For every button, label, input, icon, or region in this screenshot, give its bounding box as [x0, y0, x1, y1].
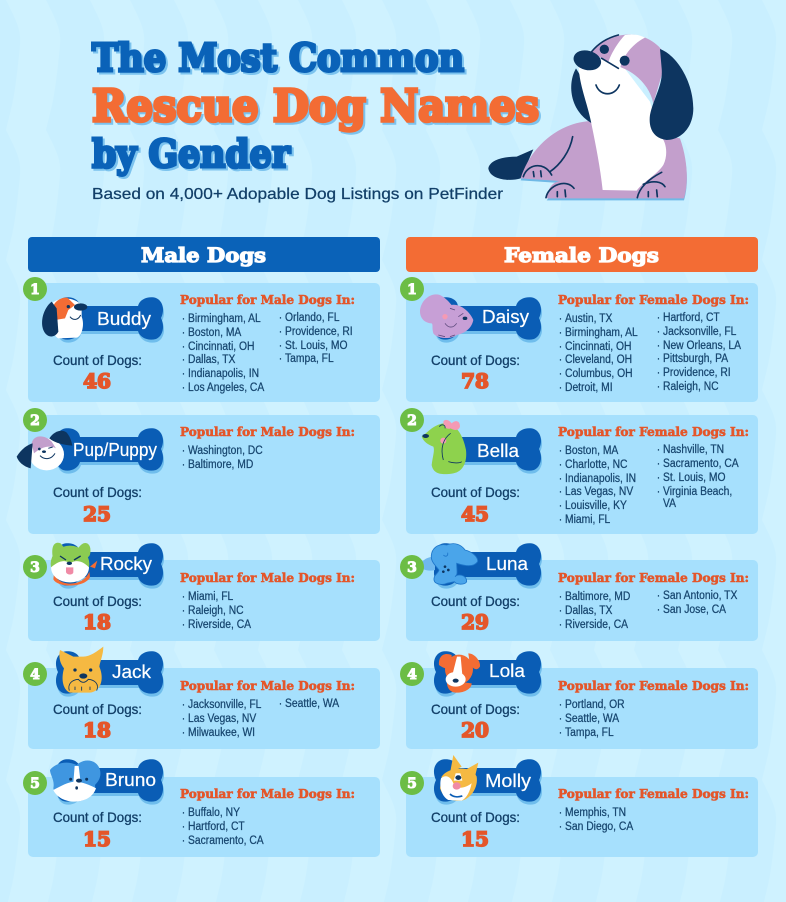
- card: Male 4 Jack: [23, 647, 380, 749]
- city list: Raleigh, NC: [663, 380, 719, 393]
- city list: Boston, MA: [565, 444, 619, 457]
- city list: Raleigh, NC: [188, 604, 244, 617]
- city list: ·: [559, 367, 562, 380]
- count value: 25: [83, 502, 111, 526]
- city list: ·: [559, 590, 562, 603]
- icon: Pup dog: [17, 431, 72, 470]
- city list: ·: [559, 806, 562, 819]
- icon: Bruno dog: [50, 760, 100, 802]
- city list: [182, 311, 353, 394]
- dog name: Lola: [489, 661, 526, 681]
- icon: Rocky dog: [51, 543, 97, 585]
- city list: ·: [182, 604, 185, 617]
- dog name: Molly: [485, 771, 531, 791]
- city list: ·: [657, 380, 660, 393]
- title: The Most Common: [92, 35, 464, 80]
- list heading: Popular for Female Dogs In:: [558, 570, 749, 585]
- icon: Bella dog: [422, 420, 466, 474]
- city list: ·: [559, 381, 562, 394]
- city list: [559, 698, 625, 739]
- city list: ·: [559, 326, 562, 339]
- city list: VA: [663, 497, 677, 510]
- card: Male 5 Bruno: [23, 759, 380, 857]
- city list: ·: [657, 325, 660, 338]
- list heading: Popular for Female Dogs In:: [558, 424, 749, 439]
- city list: [559, 443, 739, 526]
- city list: ·: [182, 367, 185, 380]
- city list: [182, 444, 263, 471]
- rank badge: [400, 277, 424, 301]
- title: by Gender: [92, 131, 291, 176]
- dog name: Bruno: [105, 770, 156, 790]
- city list: Buffalo, NY: [188, 806, 241, 819]
- city list: ·: [559, 820, 562, 833]
- panel header: Female Dogs: Female Dogs: [504, 243, 659, 267]
- dog name: Buddy: [97, 309, 151, 329]
- city list: ·: [182, 340, 185, 353]
- count label: Count of Dogs:: [431, 352, 520, 368]
- city list: ·: [182, 381, 185, 394]
- city list: Boston, MA: [188, 326, 242, 339]
- city list: ·: [279, 311, 282, 324]
- city list: ·: [182, 312, 185, 325]
- city list: ·: [182, 698, 185, 711]
- count value: 15: [83, 827, 111, 851]
- city list: ·: [657, 589, 660, 602]
- city list: ·: [559, 618, 562, 631]
- city list: San Antonio, TX: [663, 589, 738, 602]
- count label: Count of Dogs:: [53, 352, 142, 368]
- card: Male 1 Buddy: [23, 277, 380, 402]
- city list: ·: [182, 326, 185, 339]
- city list: ·: [657, 457, 660, 470]
- count value: 15: [461, 827, 489, 851]
- icon: Molly dog: [440, 755, 478, 801]
- city list: St. Louis, MO: [663, 471, 725, 484]
- city list: ·: [559, 458, 562, 471]
- icon: Luna dog: [420, 544, 478, 584]
- city list: Riverside, CA: [565, 618, 629, 631]
- list heading: Popular for Male Dogs In:: [180, 570, 355, 585]
- icon: Buddy dog: [42, 298, 87, 338]
- rank badge: 2: [30, 413, 40, 429]
- city list: ·: [182, 820, 185, 833]
- count label: Count of Dogs:: [53, 809, 142, 825]
- city list: ·: [279, 697, 282, 710]
- city list: Birmingham, AL: [565, 326, 638, 339]
- count value: 45: [461, 502, 489, 526]
- count value: 18: [83, 610, 111, 634]
- city list: ·: [182, 444, 185, 457]
- city list: ·: [559, 312, 562, 325]
- city list: ·: [279, 339, 282, 352]
- city list: [559, 311, 742, 394]
- count label: Count of Dogs:: [431, 593, 520, 609]
- city list: Louisville, KY: [565, 499, 628, 512]
- city list: Baltimore, MD: [565, 590, 630, 603]
- count value: 18: [83, 718, 111, 742]
- city list: Providence, RI: [663, 366, 731, 379]
- city list: ·: [279, 325, 282, 338]
- bone: Bella: [434, 428, 542, 474]
- city list: [559, 589, 738, 631]
- card: Female 1 Daisy: [400, 277, 758, 402]
- city list: Indianapolis, IN: [188, 367, 259, 380]
- count value: 46: [83, 369, 111, 393]
- count label: Count of Dogs:: [53, 593, 142, 609]
- city list: ·: [559, 604, 562, 617]
- rank badge: [400, 771, 424, 795]
- count label: Count of Dogs:: [53, 701, 142, 717]
- city list: Cincinnati, OH: [565, 340, 632, 353]
- card: Male 2 Pup/Puppy: [17, 408, 380, 534]
- rank badge: [23, 277, 47, 301]
- bone: Bruno: [56, 759, 164, 805]
- city list: Jacksonville, FL: [663, 325, 736, 338]
- panel header: Female Dogs: [406, 237, 758, 272]
- rank badge: 1: [407, 282, 417, 298]
- city list: Hartford, CT: [663, 311, 720, 324]
- rank badge: [400, 555, 424, 579]
- city list: ·: [182, 834, 185, 847]
- card: Female 3 Luna: [400, 543, 758, 641]
- dog name: Bella: [477, 441, 520, 461]
- bone: Daisy: [434, 297, 542, 343]
- city list: ·: [182, 806, 185, 819]
- rank badge: 5: [30, 776, 40, 792]
- city list: Virginia Beach,: [663, 485, 732, 498]
- city list: San Diego, CA: [565, 820, 634, 833]
- bone: Buddy: [56, 297, 164, 343]
- city list: Memphis, TN: [565, 806, 626, 819]
- city list: Portland, OR: [565, 698, 625, 711]
- city list: Columbus, OH: [565, 367, 633, 380]
- rank badge: 1: [30, 282, 40, 298]
- city list: ·: [182, 712, 185, 725]
- rank badge: [23, 408, 47, 432]
- title: Rescue Dog Names: [94, 83, 541, 134]
- city list: Washington, DC: [188, 444, 263, 457]
- city list: Seattle, WA: [285, 697, 340, 710]
- dog name: Daisy: [482, 307, 529, 327]
- city list: ·: [559, 472, 562, 485]
- dog name: Rocky: [100, 554, 152, 574]
- city list: Detroit, MI: [565, 381, 613, 394]
- city list: ·: [182, 458, 185, 471]
- city list: Las Vegas, NV: [188, 712, 257, 725]
- city list: ·: [657, 485, 660, 498]
- city list: Dallas, TX: [188, 353, 236, 366]
- city list: ·: [657, 603, 660, 616]
- rank badge: 5: [407, 776, 417, 792]
- bone: Rocky: [56, 543, 164, 589]
- city list: Austin, TX: [565, 312, 613, 325]
- city list: Pittsburgh, PA: [663, 352, 729, 365]
- city list: ·: [657, 352, 660, 365]
- city list: ·: [657, 339, 660, 352]
- title: by Gender: [94, 133, 293, 178]
- bone: Jack: [56, 651, 164, 697]
- city list: [182, 806, 264, 847]
- bone: Molly: [434, 759, 542, 805]
- count label: Count of Dogs:: [431, 701, 520, 717]
- rank badge: [23, 555, 47, 579]
- city list: ·: [559, 513, 562, 526]
- city list: ·: [559, 712, 562, 725]
- city list: San Jose, CA: [663, 603, 727, 616]
- city list: ·: [182, 353, 185, 366]
- city list: Baltimore, MD: [188, 458, 253, 471]
- city list: ·: [559, 698, 562, 711]
- list heading: Popular for Female Dogs In:: [558, 786, 749, 801]
- icon: Jack dog: [59, 647, 103, 693]
- city list: ·: [279, 352, 282, 365]
- title: The Most Common: [94, 37, 466, 82]
- bone: Pup/Puppy: [56, 428, 164, 474]
- count value: 29: [461, 610, 489, 634]
- city list: ·: [559, 485, 562, 498]
- city list: ·: [559, 726, 562, 739]
- rank badge: 3: [407, 560, 417, 576]
- city list: ·: [657, 471, 660, 484]
- list heading: Popular for Male Dogs In:: [180, 424, 355, 439]
- city list: Jacksonville, FL: [188, 698, 261, 711]
- panel header: Male Dogs: [28, 237, 380, 272]
- title: Rescue Dog Names: [92, 81, 539, 132]
- subtitle: Based on 4,000+ Adopable Dog Listings on PetFinder: [92, 186, 504, 203]
- rank badge: [400, 662, 424, 686]
- city list: Los Angeles, CA: [188, 381, 265, 394]
- icon: Daisy dog: [420, 294, 473, 338]
- city list: Hartford, CT: [188, 820, 245, 833]
- dog name: Pup/Puppy: [73, 440, 157, 460]
- rank badge: [23, 771, 47, 795]
- city list: Indianapolis, IN: [565, 472, 636, 485]
- city list: Birmingham, AL: [188, 312, 261, 325]
- city list: [182, 697, 340, 739]
- illustration: large sitting dog: [488, 34, 693, 200]
- list heading: Popular for Male Dogs In:: [180, 292, 355, 307]
- city list: Seattle, WA: [565, 712, 620, 725]
- bone: Lola: [434, 651, 542, 697]
- city list: Riverside, CA: [188, 618, 252, 631]
- city list: ·: [559, 340, 562, 353]
- rank badge: [400, 408, 424, 432]
- card: Female 4 Lola: [400, 651, 758, 749]
- count value: 78: [461, 369, 489, 393]
- city list: Providence, RI: [285, 325, 353, 338]
- city list: ·: [657, 366, 660, 379]
- city list: [182, 590, 252, 631]
- title: [92, 35, 541, 178]
- rank badge: 3: [30, 560, 40, 576]
- city list: Charlotte, NC: [565, 458, 628, 471]
- city list: St. Louis, MO: [285, 339, 347, 352]
- count value: 20: [461, 718, 489, 742]
- icon: Lola dog: [439, 653, 480, 693]
- list heading: Popular for Male Dogs In:: [180, 786, 355, 801]
- city list: ·: [182, 726, 185, 739]
- dog name: Jack: [112, 662, 152, 682]
- city list: Orlando, FL: [285, 311, 339, 324]
- city list: Sacramento, CA: [663, 457, 739, 470]
- list heading: Popular for Female Dogs In:: [558, 678, 749, 693]
- card: Female 2 Bella: [400, 408, 758, 534]
- rank badge: [23, 662, 47, 686]
- count label: Count of Dogs:: [53, 484, 142, 500]
- city list: Nashville, TN: [663, 443, 724, 456]
- city list: Cincinnati, OH: [188, 340, 255, 353]
- city list: Milwaukee, WI: [188, 726, 255, 739]
- city list: [559, 806, 634, 833]
- rank badge: 4: [407, 667, 417, 683]
- rank badge: 2: [407, 413, 417, 429]
- list heading: Popular for Male Dogs In:: [180, 678, 355, 693]
- city list: ·: [182, 590, 185, 603]
- city list: ·: [559, 499, 562, 512]
- rank badge: 4: [30, 667, 40, 683]
- dog name: Luna: [486, 554, 529, 574]
- list heading: Popular for Female Dogs In:: [558, 292, 749, 307]
- city list: Sacramento, CA: [188, 834, 264, 847]
- city list: New Orleans, LA: [663, 339, 742, 352]
- city list: Tampa, FL: [565, 726, 614, 739]
- city list: ·: [657, 443, 660, 456]
- city list: Tampa, FL: [285, 352, 334, 365]
- city list: Cleveland, OH: [565, 353, 632, 366]
- city list: ·: [657, 311, 660, 324]
- count label: Count of Dogs:: [431, 809, 520, 825]
- bone: Luna: [434, 543, 542, 589]
- city list: Miami, FL: [565, 513, 610, 526]
- city list: Las Vegas, NV: [565, 485, 634, 498]
- count label: Count of Dogs:: [431, 484, 520, 500]
- panel header: Male Dogs: Male Dogs: [141, 243, 266, 267]
- city list: ·: [182, 618, 185, 631]
- city list: ·: [559, 444, 562, 457]
- city list: ·: [559, 353, 562, 366]
- card: Female 5 Molly: [400, 755, 758, 857]
- city list: Dallas, TX: [565, 604, 613, 617]
- card: Male 3 Rocky: [23, 543, 380, 641]
- city list: Miami, FL: [188, 590, 233, 603]
